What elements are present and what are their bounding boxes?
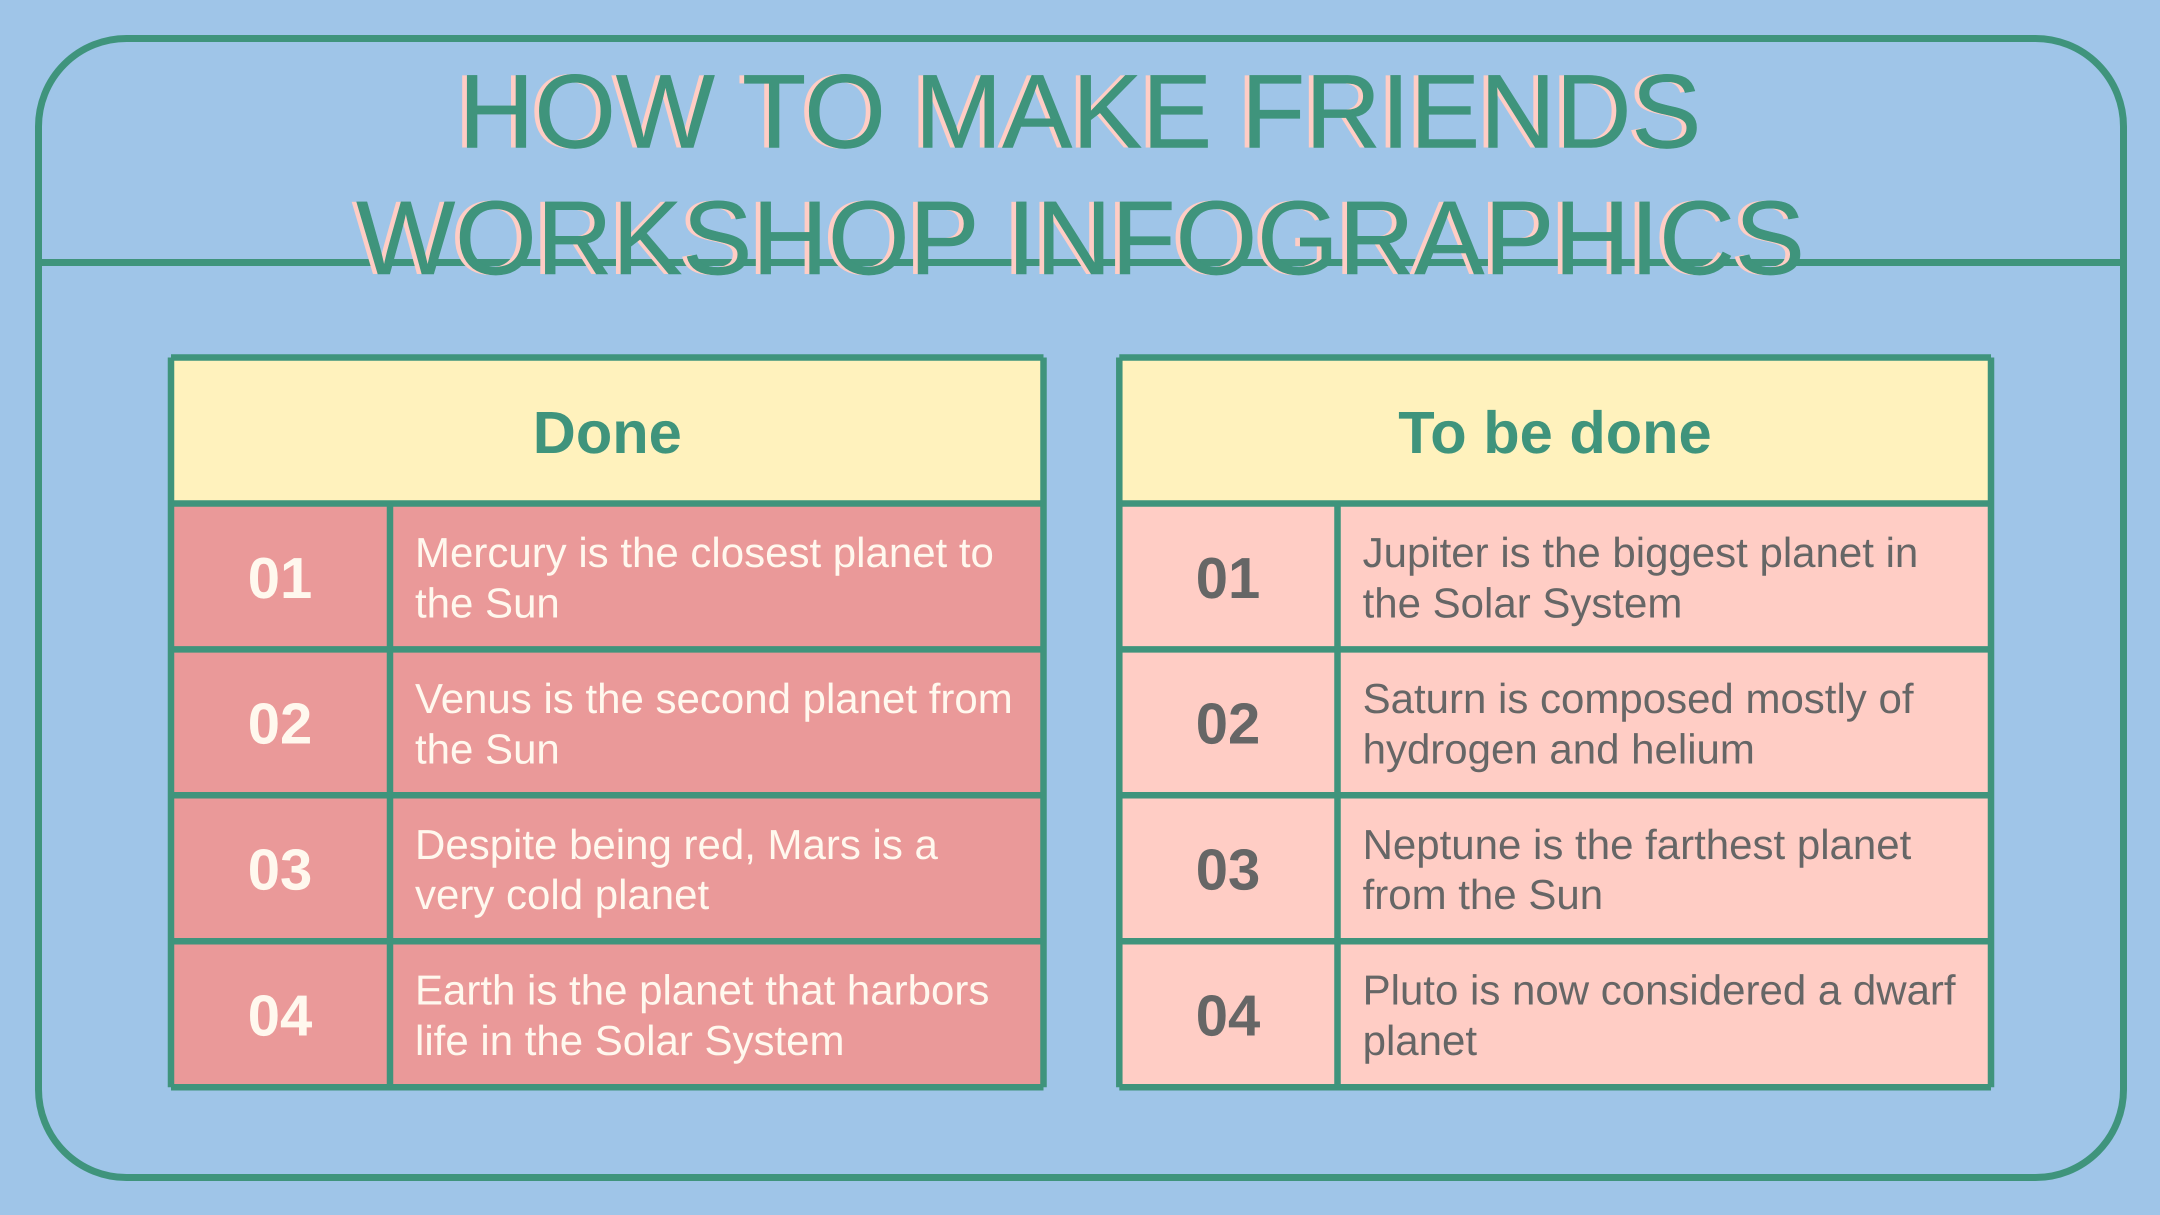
title: WORKSHOP INFOGRAPHICS <box>356 180 1805 297</box>
row 01: to be done: the Solar System <box>1363 579 1682 626</box>
row 03: done <box>248 821 939 918</box>
row 03: to be done: Neptune is the farthest planet <box>1363 821 1912 868</box>
row 03: to be done: 03 <box>1196 838 1260 903</box>
row 04: done: Earth is the planet that harbors <box>415 967 989 1014</box>
row backgrounds: to be done <box>1119 504 1991 1088</box>
row 02: done: 02 <box>248 692 312 757</box>
row 02: to be done: 02 <box>1196 692 1260 757</box>
row 04: to be done: 04 <box>1196 984 1260 1048</box>
row 02: to be done <box>1196 675 1914 772</box>
grid lines: to be done <box>1119 358 1991 1087</box>
row 01: done <box>248 529 994 626</box>
title <box>351 54 1805 297</box>
panel: done <box>171 358 1044 1088</box>
row 02: done: the Sun <box>415 725 560 772</box>
header: to be done <box>1119 358 1991 504</box>
title: HOW TO MAKE FRIENDS <box>459 54 1701 171</box>
header: to be done: To be done <box>1398 399 1712 466</box>
grid lines: done <box>171 358 1044 1087</box>
row 02: to be done: hydrogen and helium <box>1363 725 1755 772</box>
header: done <box>171 358 1044 504</box>
title: WORKSHOP INFOGRAPHICS <box>351 180 1800 297</box>
row 03: done: 03 <box>248 838 312 903</box>
row 04: to be done: planet <box>1363 1017 1477 1064</box>
row 04: to be done: Pluto is now considered a dwarf <box>1363 967 1956 1014</box>
row 01: done: Mercury is the closest planet to <box>415 529 994 576</box>
row 02: done: Venus is the second planet from <box>415 675 1013 722</box>
row backgrounds: done <box>171 504 1044 1088</box>
row 03: done: Despite being red, Mars is a <box>415 821 939 868</box>
row 04: done <box>248 967 989 1064</box>
title: HOW TO MAKE FRIENDS <box>454 54 1696 171</box>
row 04: done: life in the Solar System <box>415 1017 845 1064</box>
row 01: to be done: 01 <box>1196 546 1260 611</box>
row 04: done: 04 <box>248 984 312 1048</box>
row 02: done <box>248 675 1013 772</box>
row 02: to be done: Saturn is composed mostly of <box>1363 675 1914 722</box>
row 03: to be done: from the Sun <box>1363 871 1603 918</box>
panel: to be done <box>1119 358 1991 1088</box>
header: done: Done <box>533 399 682 466</box>
row 01: done: the Sun <box>415 579 560 626</box>
row 01: done: 01 <box>248 546 312 611</box>
row 01: to be done <box>1196 529 1918 626</box>
row 04: to be done <box>1196 967 1956 1064</box>
row 03: to be done <box>1196 821 1912 918</box>
row 03: done: very cold planet <box>415 871 709 918</box>
row 01: to be done: Jupiter is the biggest planet in <box>1363 529 1918 576</box>
